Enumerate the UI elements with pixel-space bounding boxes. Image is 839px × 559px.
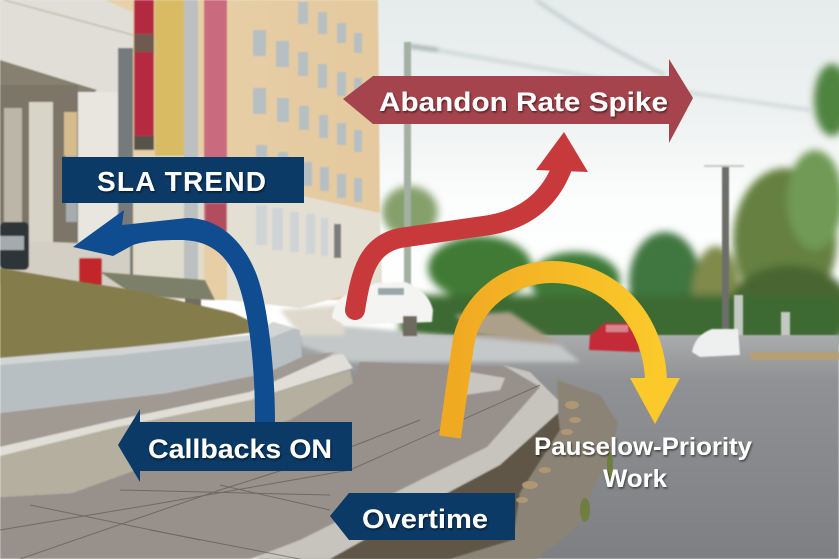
label: Pauselow-Priority Work: Work <box>603 465 667 493</box>
arrow: yellow U-turn arrow <box>450 272 680 437</box>
label: Callbacks ON: Callbacks ON <box>148 434 332 464</box>
buildings <box>0 0 382 308</box>
label: Overtime: Overtime <box>362 504 488 534</box>
label: SLA TREND: SLA TREND <box>97 166 266 197</box>
grass and near kerbs <box>0 268 618 559</box>
far poles <box>404 42 790 355</box>
arrow: red rising arrow <box>355 132 588 310</box>
label: SLA TREND <box>62 157 304 203</box>
arrow: blue curved arrow <box>73 210 275 422</box>
label: Abandon Rate Spike <box>343 59 693 143</box>
label: Callbacks ON <box>118 409 352 482</box>
label: Pauselow-Priority Work: Pauselow-Priority <box>534 433 752 461</box>
label: Abandon Rate Spike: Abandon Rate Spike <box>379 87 668 117</box>
far road and cars <box>260 335 839 559</box>
label: Overtime <box>330 493 515 540</box>
label: Pauselow-Priority Work <box>534 433 752 493</box>
trees <box>382 64 839 355</box>
left white building <box>0 0 133 280</box>
